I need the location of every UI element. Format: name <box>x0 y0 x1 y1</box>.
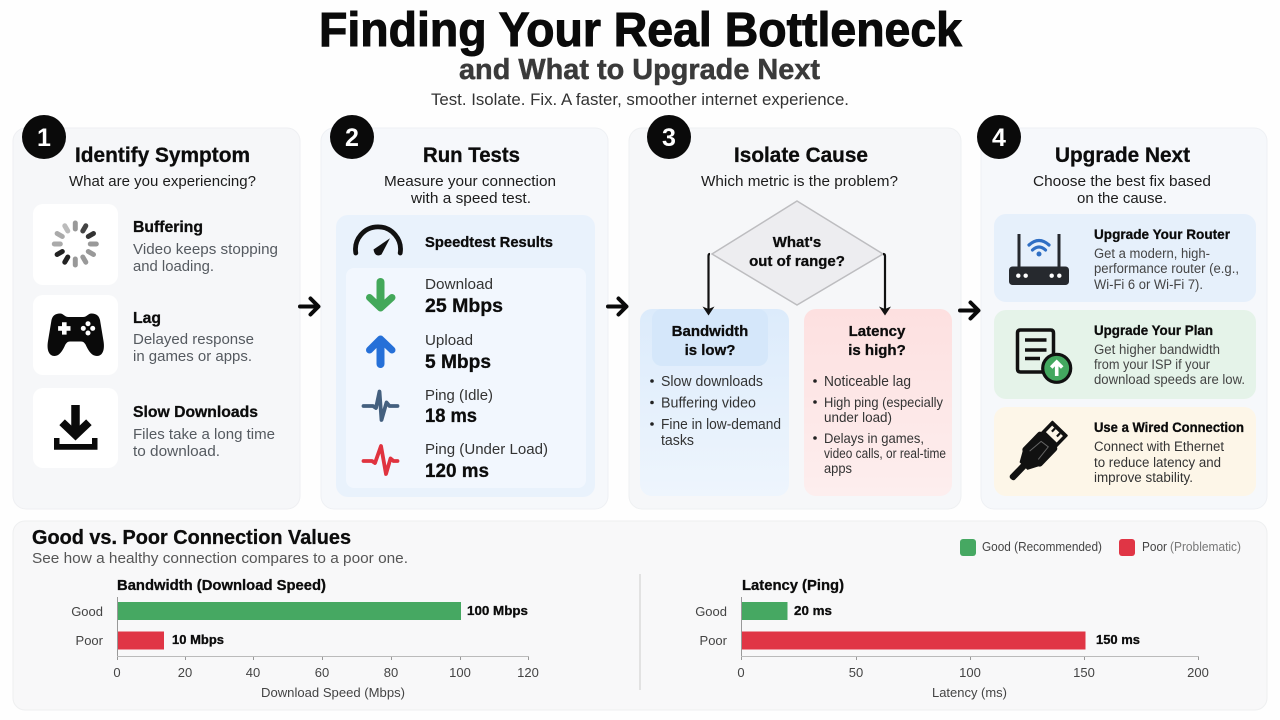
heading: Upgrade Next <box>1055 144 1190 167</box>
icon: upload arrow <box>370 339 392 364</box>
legend: (Problematic) <box>1170 540 1241 554</box>
description: wired connection <box>1094 439 1224 485</box>
list: bandwidth symptoms: Buffering video <box>661 396 756 412</box>
label: bandwidth is low <box>672 323 748 359</box>
badge 4 <box>977 115 1021 159</box>
description: upgrade plan: download speeds are low. <box>1094 372 1245 387</box>
question: What are you experiencing? <box>69 173 256 190</box>
metric: ping idle <box>425 387 493 427</box>
label: wired connection: Use a Wired Connection <box>1094 419 1244 435</box>
description: upgrade router: performance router (e.g., <box>1094 261 1239 276</box>
list: latency symptoms: video calls, or real-time <box>824 446 946 461</box>
question: Which metric is the problem? <box>701 173 898 190</box>
subtitle: and What to Upgrade Next <box>459 54 820 86</box>
metric: upload <box>425 332 491 373</box>
metric: ping idle: Ping (Idle) <box>425 387 493 404</box>
label: latency is high: is high? <box>848 342 906 359</box>
badge 2 <box>330 115 374 159</box>
description: buffering: Video keeps stopping <box>133 241 278 258</box>
badge 1 <box>22 115 66 159</box>
label: upgrade router: Upgrade Your Router <box>1094 226 1231 242</box>
chart: latency: 100 <box>959 665 981 680</box>
panel: step 2 run tests <box>321 115 608 509</box>
description: slow downloads <box>133 426 275 460</box>
box: latency <box>804 309 952 496</box>
chart: latency: 150 <box>1073 665 1095 680</box>
arrow: to bandwidth <box>702 254 714 316</box>
list: bandwidth symptoms: tasks <box>661 433 694 449</box>
arrow: to latency <box>879 254 891 316</box>
title: Finding Your Real Bottleneck <box>319 4 962 57</box>
chart: latency: Latency (Ping) <box>742 578 844 594</box>
list: bandwidth symptoms: Slow downloads <box>661 374 763 390</box>
panel: step 4 upgrade next <box>977 115 1267 509</box>
box: bandwidth <box>640 309 789 496</box>
chart: latency: Poor <box>700 633 728 648</box>
chart: bandwidth: Bandwidth (Download Speed) <box>117 578 326 594</box>
list: latency symptoms: Delays in games, <box>824 430 924 446</box>
metric: download: 25 Mbps <box>425 296 503 317</box>
list: latency symptoms: apps <box>824 460 852 476</box>
description: upgrade plan: Get higher bandwidth <box>1094 342 1220 357</box>
card: upgrade router <box>994 214 1256 302</box>
icon: ethernet cable <box>1002 419 1070 488</box>
metric: upload: 5 Mbps <box>425 352 491 373</box>
chart: bandwidth <box>71 578 539 700</box>
decision diamond <box>712 201 883 305</box>
description: upgrade router <box>1094 246 1239 292</box>
metric: upload: Upload <box>425 332 473 349</box>
chart: bandwidth: Poor <box>76 633 104 648</box>
description: upgrade plan <box>1094 342 1245 387</box>
description: buffering: and loading. <box>133 258 214 275</box>
badge 3: 3 <box>662 124 676 152</box>
badge 1: 1 <box>37 124 51 152</box>
chart: latency: Good <box>695 604 727 619</box>
chart: bandwidth: 40 <box>246 665 260 680</box>
description: Choose the best fix based <box>1033 173 1211 190</box>
list: latency symptoms: High ping (especially <box>824 394 943 410</box>
chart: bandwidth: 80 <box>384 665 398 680</box>
heading: Identify Symptom <box>75 144 250 167</box>
description <box>384 173 556 207</box>
arrow: step 1 to step 2 <box>300 298 318 314</box>
description: on the cause. <box>1077 190 1167 207</box>
chart: latency: 200 <box>1187 665 1209 680</box>
card: upgrade plan <box>994 310 1256 399</box>
heading: Run Tests <box>423 144 520 167</box>
chart: bandwidth: 120 <box>517 665 539 680</box>
icon: spinner <box>54 223 96 265</box>
chart: latency: Latency (ms) <box>932 685 1007 700</box>
panel: good vs poor values <box>13 521 1267 710</box>
badge 2: 2 <box>345 124 359 152</box>
card: slow downloads <box>33 388 275 468</box>
icon: idle ping pulse <box>364 392 398 420</box>
chart: bandwidth: 100 <box>449 665 471 680</box>
description: buffering <box>133 241 278 275</box>
decision diamond: out of range? <box>749 253 845 270</box>
section heading: Good vs. Poor Connection Values <box>32 527 351 549</box>
description: upgrade router: Get a modern, high- <box>1094 246 1210 261</box>
description: Measure your connection <box>384 173 556 190</box>
card: buffering <box>33 204 278 285</box>
list: bandwidth symptoms: Fine in low-demand <box>661 417 781 433</box>
description: lag <box>133 331 254 365</box>
chart: bandwidth: 20 <box>178 665 192 680</box>
label: latency is high <box>848 323 906 359</box>
metric: ping under load: 120 ms <box>425 461 489 482</box>
metric: download: Download <box>425 276 493 293</box>
description: slow downloads: Files take a long time <box>133 426 275 443</box>
decision diamond: What's <box>773 234 821 251</box>
panel: step 3 isolate cause <box>629 115 961 509</box>
description: upgrade router: Wi-Fi 6 or Wi-Fi 7). <box>1094 277 1203 292</box>
description: lag: in games or apps. <box>133 348 252 365</box>
chart: latency: 150 ms <box>1096 632 1140 647</box>
icon: download arrow <box>370 282 392 308</box>
legend: Good (Recommended) <box>982 540 1102 554</box>
description: wired connection: improve stability. <box>1094 470 1193 485</box>
description: wired connection: to reduce latency and <box>1094 455 1221 470</box>
card: lag <box>33 295 254 375</box>
metric: ping under load <box>425 441 548 482</box>
chart: latency: 0 <box>737 665 745 680</box>
label: bandwidth is low: Bandwidth <box>672 323 748 340</box>
badge 3 <box>647 115 691 159</box>
legend: Poor <box>1142 540 1167 554</box>
list: latency symptoms: Noticeable lag <box>824 374 911 390</box>
panel: step 1 identify symptom <box>13 115 300 509</box>
icon: download <box>54 405 98 450</box>
icon: gauge <box>355 227 401 256</box>
chart: bandwidth: Download Speed (Mbps) <box>261 685 405 700</box>
chart: bandwidth: 10 Mbps <box>172 632 224 647</box>
chart: latency: 20 ms <box>794 603 832 618</box>
arrow: step 2 to step 3 <box>608 298 626 314</box>
badge 4: 4 <box>992 124 1006 152</box>
label: slow downloads: Slow Downloads <box>133 404 258 421</box>
chart: bandwidth: Good <box>71 604 103 619</box>
tagline: Test. Isolate. Fix. A faster, smoother internet experience. <box>431 90 849 109</box>
section description: See how a healthy connection compares to a poor one. <box>32 550 408 567</box>
legend <box>960 539 1241 556</box>
description: lag: Delayed response <box>133 331 254 348</box>
icon: load ping pulse <box>364 446 398 474</box>
chart: bandwidth: 60 <box>315 665 329 680</box>
arrow: step 3 to step 4 <box>960 302 978 318</box>
label: bandwidth is low: is low? <box>685 342 735 359</box>
metric: download <box>425 276 503 317</box>
description: upgrade plan: from your ISP if your <box>1094 357 1210 372</box>
panel: speedtest results <box>336 215 595 497</box>
chart: latency <box>695 578 1209 700</box>
description: wired connection: Connect with Ethernet <box>1094 439 1224 454</box>
label: speedtest results: Speedtest Results <box>425 235 553 251</box>
metric: ping under load: Ping (Under Load) <box>425 441 548 458</box>
label: latency is high: Latency <box>849 323 906 340</box>
label: upgrade plan: Upgrade Your Plan <box>1094 322 1213 338</box>
chart: bandwidth: 100 Mbps <box>467 603 528 618</box>
description: with a speed test. <box>410 190 531 207</box>
icon: router <box>1009 234 1069 285</box>
heading: Isolate Cause <box>734 144 868 167</box>
card: wired connection <box>994 407 1256 496</box>
list: bandwidth symptoms <box>650 374 781 449</box>
list: latency symptoms: under load) <box>824 409 892 425</box>
label: lag: Lag <box>133 310 161 327</box>
icon: plan document <box>1018 330 1071 382</box>
label: buffering: Buffering <box>133 219 203 236</box>
metric: ping idle: 18 ms <box>425 406 477 427</box>
list: latency symptoms <box>813 374 946 476</box>
icon: game controller <box>48 314 104 356</box>
chart: latency: 50 <box>849 665 863 680</box>
chart: bandwidth: 0 <box>113 665 121 680</box>
description: slow downloads: to download. <box>133 443 220 460</box>
title <box>319 4 962 109</box>
description <box>1033 173 1211 207</box>
